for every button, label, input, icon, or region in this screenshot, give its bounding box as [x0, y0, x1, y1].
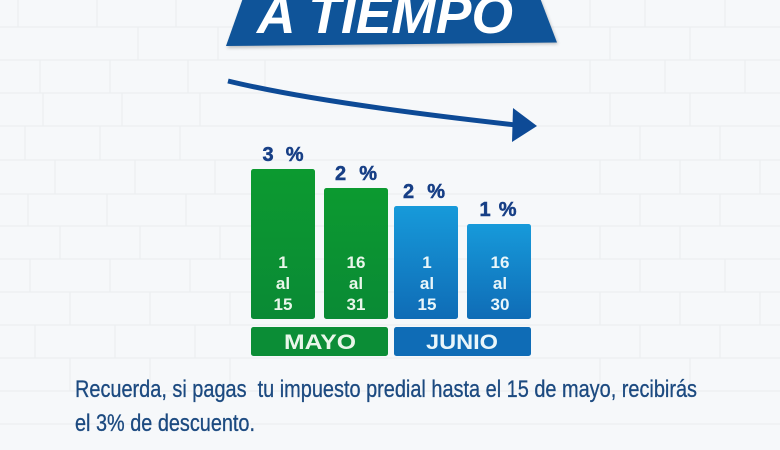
bar: 3% mayo 1 al 15: 1	[278, 253, 288, 272]
arrow: descending discount	[228, 81, 537, 142]
bar: 1% junio 16 al 30	[467, 199, 531, 319]
title banner	[226, 0, 558, 48]
bar: 3% mayo 1 al 15: 15	[274, 295, 292, 314]
bar: 3% mayo 1 al 15: 3 %	[262, 144, 304, 166]
bar: 3% mayo 1 al 15	[251, 144, 315, 319]
bar: 1% junio 16 al 30: al	[493, 274, 507, 293]
bar: 1% junio 16 al 30: 1 %	[480, 199, 517, 221]
bar: 2% mayo 16 al 31: 31	[347, 295, 365, 314]
bar: 2% junio 1 al 15: al	[420, 274, 434, 293]
month label: junio: JUNIO	[426, 331, 498, 354]
bar: 2% junio 1 al 15: 1	[422, 253, 432, 272]
month label: junio	[394, 327, 531, 356]
bar: 2% mayo 16 al 31: 2 %	[335, 163, 377, 185]
bar: 2% mayo 16 al 31	[324, 163, 388, 319]
month label: mayo	[251, 327, 388, 356]
month label: mayo: MAYO	[284, 331, 356, 354]
bar: 2% mayo 16 al 31: al	[349, 274, 363, 293]
reminder text	[75, 376, 697, 437]
bar: 2% mayo 16 al 31: 16	[347, 253, 365, 272]
bar chart: discounts by period	[251, 144, 531, 356]
bar: 1% junio 16 al 30: 16	[491, 253, 509, 272]
bar: 3% mayo 1 al 15: al	[276, 274, 290, 293]
bar: 2% junio 1 al 15: 15	[418, 295, 436, 314]
reminder text: el 3% de descuento.	[75, 410, 255, 437]
bar: 2% junio 1 al 15: 2 %	[403, 181, 445, 203]
bar: 2% junio 1 al 15	[394, 181, 458, 319]
bar: 1% junio 16 al 30: 30	[491, 295, 509, 314]
